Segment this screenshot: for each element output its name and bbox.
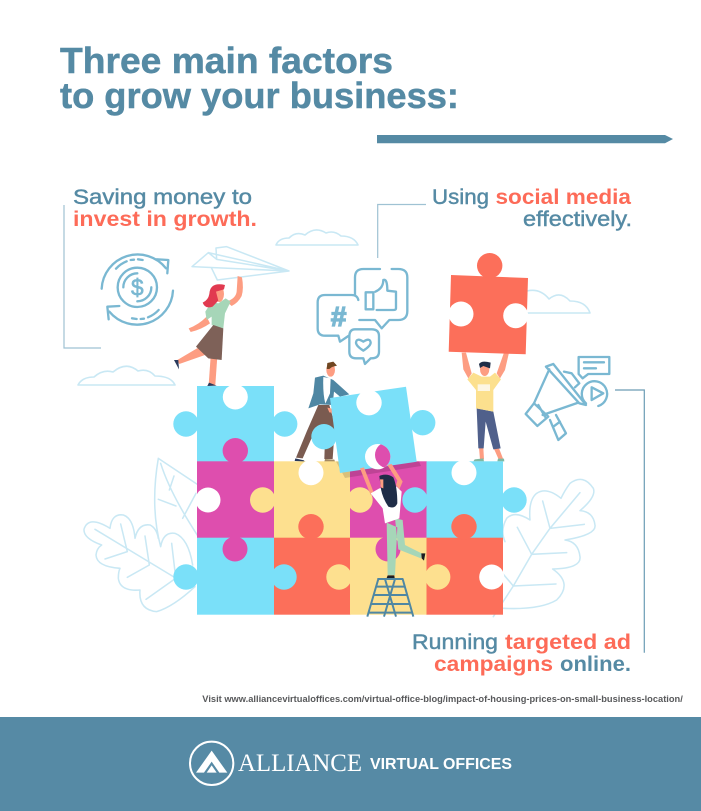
icon: paper plane (192, 247, 289, 280)
cloud: right (527, 290, 590, 313)
source link: Visit www.alliancevirtualoffices.com/virtual-office-blog/impact-of-housing-prices-on-small-business-location/ (202, 694, 683, 704)
heading: targeted ads: targeted ad (505, 630, 631, 654)
heading: social media: social media (496, 185, 632, 209)
heading: saving money (73, 185, 257, 231)
title (60, 40, 459, 116)
heading: targeted ads: online. (560, 652, 631, 676)
heading: targeted ads (412, 630, 631, 676)
logo wordmark: ALLIANCE (238, 750, 362, 777)
icon: money cycle (102, 254, 173, 325)
title: to grow your business: (60, 75, 459, 116)
heading: social media (432, 185, 632, 231)
puzzle knobs and holes (173, 384, 527, 590)
icon: money cycle: $ (131, 274, 144, 300)
icon: megaphone (526, 357, 609, 440)
leaf group: left (84, 458, 198, 612)
title: Three main factors (60, 40, 393, 81)
leaf: right (493, 479, 595, 617)
heading: social media: effectively. (523, 207, 632, 231)
shadow of tilted piece (336, 462, 421, 478)
connector: saving money (64, 205, 101, 348)
arrow bar under title (377, 135, 673, 143)
heading: social media: Using (432, 185, 489, 209)
figure: woman on ladder (360, 464, 425, 617)
orange puzzle piece held up (448, 253, 528, 354)
logo subtitle: VIRTUAL OFFICES (370, 756, 512, 773)
footer band (0, 717, 701, 811)
piece row two: magenta, yellow, magenta, blue (197, 461, 503, 538)
heading: saving money: Saving money to (73, 185, 252, 209)
ladder (367, 579, 413, 617)
icon: social media bubbles: # (331, 301, 347, 332)
figure: man lifting piece (462, 353, 509, 461)
logo mark (190, 742, 233, 785)
heading: targeted ads: campaigns (434, 652, 553, 676)
piece row one: blue (173, 386, 297, 462)
heading: saving money: invest in growth. (73, 207, 257, 231)
cloud: top centre (276, 230, 358, 245)
connector: social media (378, 204, 426, 258)
icon: social media bubbles (318, 269, 407, 364)
heading: targeted ads: Running (412, 630, 498, 654)
tilted blue puzzle piece (311, 387, 435, 473)
figure: man pushing piece (295, 362, 349, 462)
connector: targeted ads (615, 390, 644, 653)
cloud: lower left (78, 366, 175, 385)
piece row three: blue, orange, yellow, orange (197, 538, 503, 615)
puzzle wall (173, 384, 527, 615)
figure: woman with plane (174, 276, 243, 386)
